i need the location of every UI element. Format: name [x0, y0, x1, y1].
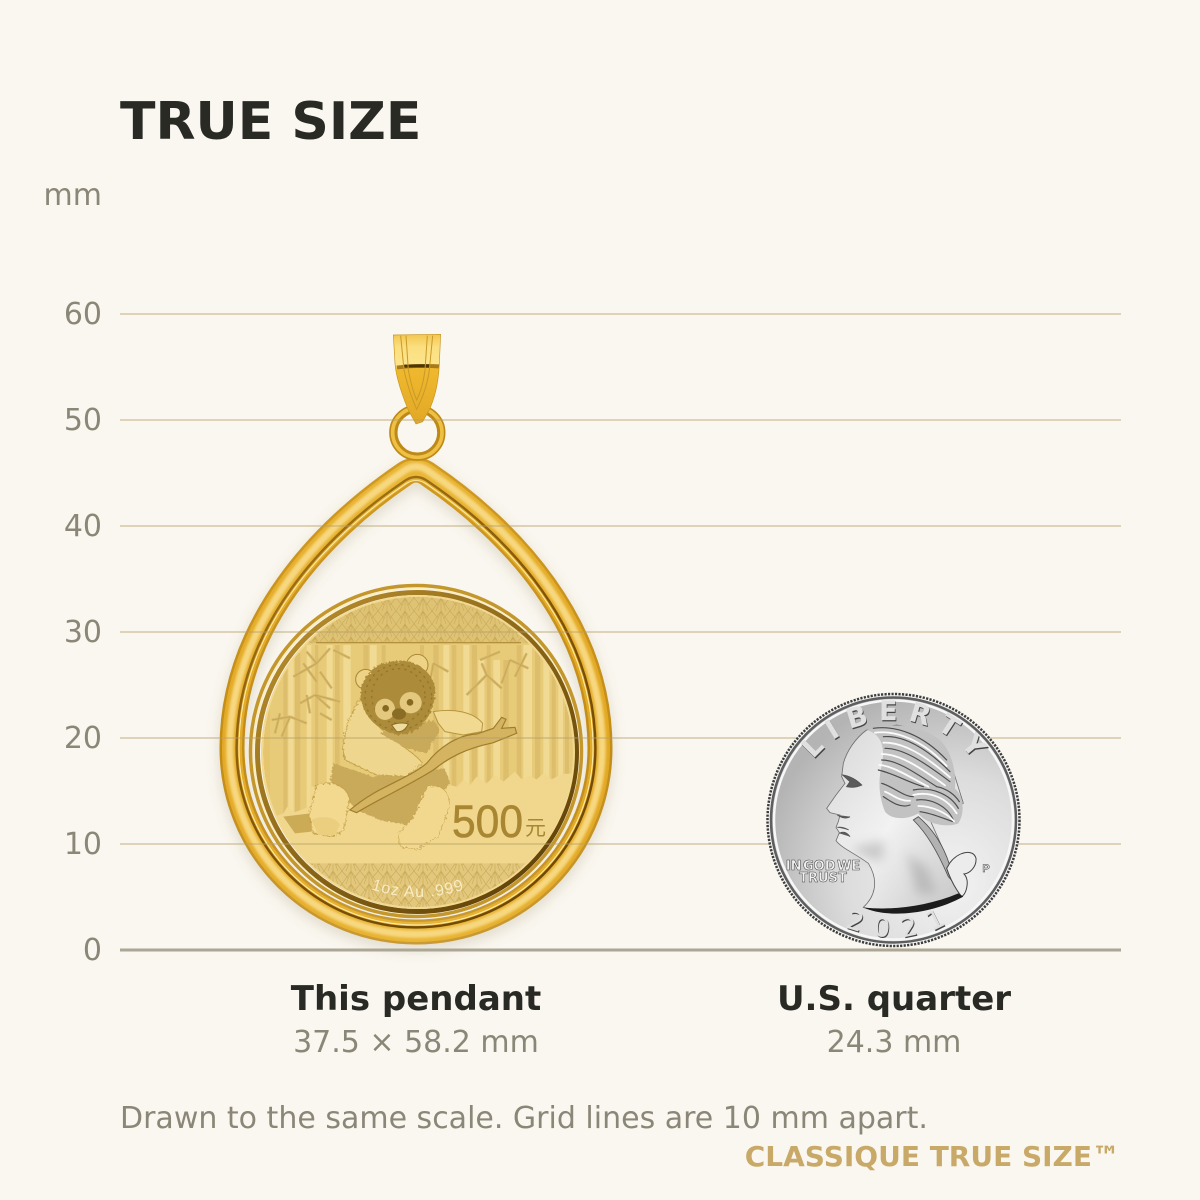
- motto: [786, 859, 860, 886]
- right arm: [433, 710, 483, 735]
- bamboo background: [270, 643, 577, 850]
- hair strands: [873, 728, 959, 822]
- teardrop frame: [230, 467, 602, 934]
- branch stump: [283, 813, 312, 833]
- top patterned band: [308, 597, 528, 644]
- coin face: [263, 597, 573, 907]
- y axis labels: 10: [64, 827, 102, 862]
- hair: [867, 726, 963, 825]
- ears: [355, 668, 372, 688]
- LIBERTY: LIBERTY: [802, 702, 989, 759]
- axis unit label: mm: [44, 178, 102, 213]
- coin rim: [771, 698, 1016, 942]
- queue: [913, 817, 957, 887]
- lower body dark fur: [330, 763, 450, 825]
- bail and jump ring: [393, 334, 442, 457]
- title: TRUE SIZE: [120, 92, 421, 152]
- head: [361, 661, 435, 735]
- torso fur: [343, 698, 423, 777]
- ribbon bow: [947, 852, 976, 897]
- y axis labels: 60: [64, 297, 102, 332]
- Washington portrait: [827, 725, 976, 914]
- category label: pendant: 37.5 × 58.2 mm: [293, 1025, 539, 1060]
- y axis labels: 40: [64, 509, 102, 544]
- brand line: CLASSIQUE TRUE SIZE™: [745, 1140, 1120, 1173]
- U.S. quarter illustration: [766, 692, 1021, 948]
- denomination: 500: [452, 796, 523, 847]
- motto: TRUST: [799, 871, 847, 886]
- coin ground: [270, 772, 577, 863]
- neck shading: [850, 840, 937, 893]
- year: [848, 910, 946, 938]
- eye, brow and mouth shading: [837, 775, 862, 837]
- face markings: [375, 699, 395, 720]
- bottom patterned band: [310, 862, 526, 907]
- y axis labels: 30: [64, 615, 102, 650]
- y axis labels: [64, 297, 102, 968]
- horizontal grid lines: [120, 314, 1121, 844]
- category label: pendant: [291, 979, 541, 1060]
- pendant illustration: [214, 334, 618, 954]
- panda: [283, 654, 517, 850]
- motto: IN GOD WE: [786, 859, 860, 874]
- left foot: [312, 817, 340, 835]
- left leg: [309, 783, 350, 837]
- y axis labels: 50: [64, 403, 102, 438]
- panda gold coin: [263, 597, 573, 907]
- year: 2021: [848, 911, 946, 938]
- baseline: [120, 948, 1121, 952]
- category label: quarter: 24.3 mm: [827, 1025, 961, 1060]
- infographic canvas: [46, 100, 1121, 1170]
- weight inscription: 1oz Au .999: [372, 880, 462, 898]
- yuan glyph: 元: [525, 817, 546, 840]
- shoulder dark fur: [380, 720, 440, 753]
- face and bust: [827, 725, 963, 913]
- scale note: Drawn to the same scale. Grid lines are 10 mm apart.: [120, 1101, 928, 1136]
- year: 2021: [848, 910, 944, 937]
- branch: [350, 717, 517, 813]
- mint mark: P: [982, 863, 990, 875]
- reeded edge: [768, 694, 1020, 946]
- LIBERTY: LIBERTY: [801, 700, 988, 758]
- head fur strokes: [365, 665, 432, 730]
- category label: pendant: This pendant: [291, 979, 541, 1019]
- category label: quarter: [777, 979, 1011, 1060]
- y axis labels: 0: [83, 933, 102, 968]
- coin bezel: [250, 586, 582, 916]
- bust shadow: [863, 893, 963, 914]
- pendant shadow: [232, 475, 600, 937]
- y axis labels: 20: [64, 721, 102, 756]
- right leg: [398, 786, 449, 850]
- category label: quarter: U.S. quarter: [777, 979, 1011, 1019]
